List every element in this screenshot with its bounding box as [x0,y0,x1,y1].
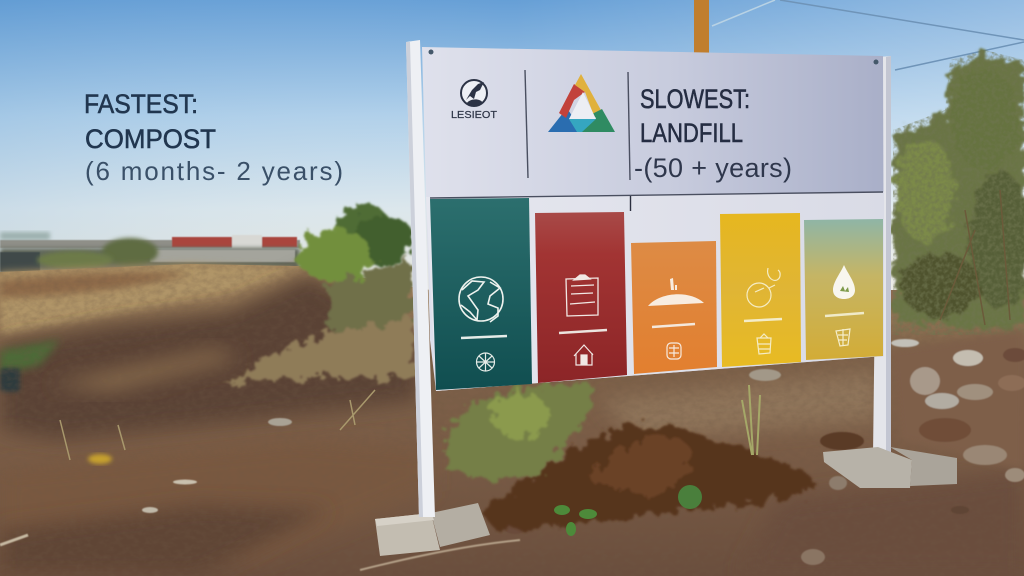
ground [0,262,1024,576]
divider: orange [652,324,695,327]
icon: fruit and sprout [747,268,780,307]
icon: badge [667,343,681,359]
sky [0,0,1024,290]
divider: red [559,330,607,333]
divider: yellow [744,319,782,321]
panel: teal [430,198,532,390]
panel: red [535,212,627,383]
heading: fastest compost: FASTEST: [84,89,198,119]
foreground weeds [60,382,760,480]
panel: yellow [720,213,801,367]
heading: slowest landfill: LANDFILL [640,118,743,148]
heading: fastest compost [84,89,343,186]
heading: fastest compost: (6 months- 2 years) [85,156,343,186]
heading: slowest landfill: -(50 + years) [634,153,792,183]
icon: company logo: LESIEOT [451,109,498,121]
divider: teal [461,336,507,338]
panel: orange [631,241,717,374]
icon: globe [459,277,503,322]
heading: fastest compost: COMPOST [85,124,216,154]
divider: sage [825,313,864,316]
heading: slowest landfill [634,84,792,183]
left concrete base [375,503,490,556]
icon: compost dome [648,278,704,306]
distant horizon buildings [0,232,300,272]
heading: slowest landfill: SLOWEST: [640,84,750,114]
right-side shrubs [890,50,1024,335]
left sign post [406,40,435,517]
icon: jar [757,334,771,354]
right sign post [873,56,891,455]
icon: wheel [476,353,494,371]
seedlings [554,485,702,536]
icon: water drop [833,265,855,299]
sign board [422,47,884,391]
panel: sage [804,219,883,360]
icon: colored recycling triangle [548,74,615,132]
dirt mound [480,424,813,530]
sign dividers [430,70,883,211]
icon: clipboard [566,275,598,316]
rocks and rubble [0,330,1024,570]
icon: house [574,345,593,365]
icon: plant pot [836,329,850,346]
wooden pole behind sign [694,0,709,54]
icon: company logo [451,80,498,121]
right concrete base [823,447,957,488]
power lines [712,0,1024,70]
mid-distance bushes [225,204,414,385]
